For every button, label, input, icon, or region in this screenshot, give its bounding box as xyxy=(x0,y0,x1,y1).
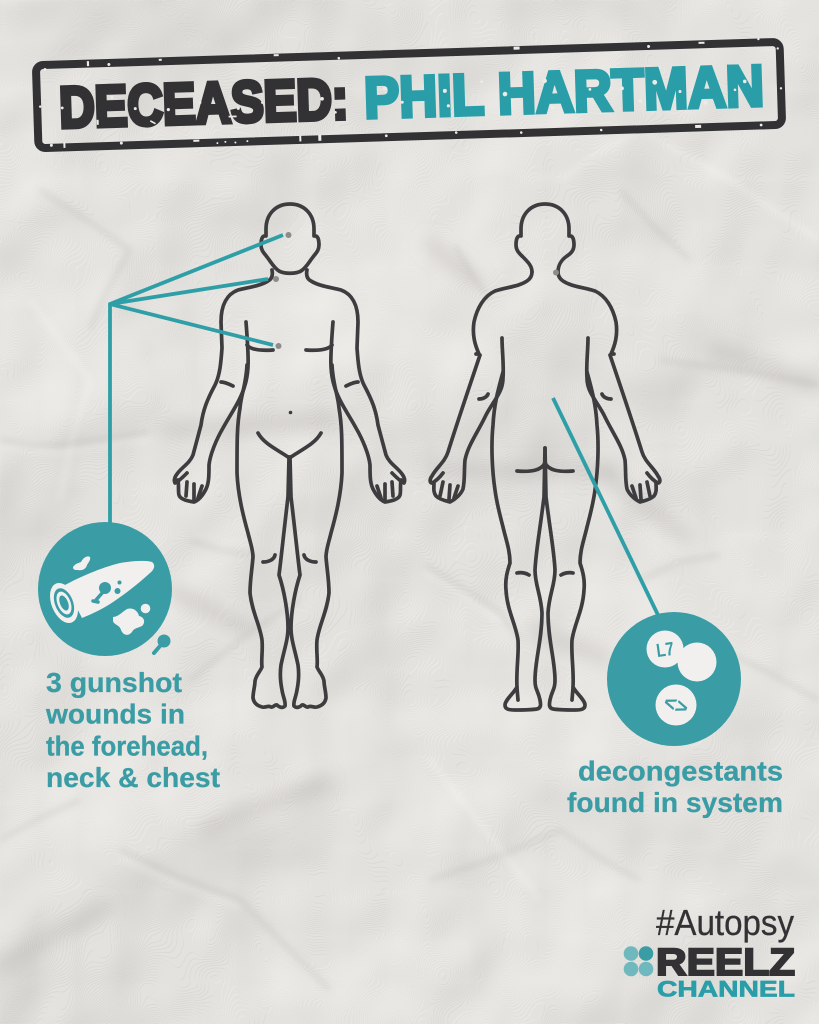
text: gunshot wounds: the forehead, xyxy=(46,730,208,762)
blood drop xyxy=(158,634,170,648)
text: decongestants: decongestants xyxy=(578,756,783,786)
leader lines: gunshot wounds xyxy=(110,235,283,525)
front head xyxy=(261,204,319,273)
text: decongestants: found in system xyxy=(567,787,783,818)
text: gunshot wounds: 3 gunshot xyxy=(46,667,182,698)
leader line: decongestants xyxy=(553,398,658,615)
logo dots xyxy=(624,946,653,976)
title stamp xyxy=(36,37,783,150)
debris xyxy=(113,608,144,635)
front body figure xyxy=(174,204,405,707)
back body left half xyxy=(430,272,545,710)
logo word REELZ: REELZ xyxy=(656,942,795,984)
text: gunshot wounds xyxy=(45,667,220,793)
logo word CHANNEL: CHANNEL xyxy=(657,976,795,1002)
wound markers xyxy=(273,232,559,349)
stamp border xyxy=(36,42,782,148)
back head xyxy=(516,204,574,272)
bullet base rings xyxy=(45,579,83,627)
icon: bullet circle xyxy=(38,522,172,656)
blank pill xyxy=(678,642,716,682)
bullet hole xyxy=(93,580,122,602)
text: decongestants xyxy=(567,756,783,818)
pill with angle mark: <> xyxy=(660,690,691,720)
text: gunshot wounds: wounds in xyxy=(45,698,185,730)
title text: name: PHIL HARTMAN xyxy=(363,53,765,131)
front navel xyxy=(289,411,292,414)
pill with L7 mark: L7 xyxy=(655,637,675,662)
bullet body xyxy=(65,561,154,618)
title text: deceased: DECEASED: xyxy=(58,66,349,141)
logo: Reelz Channel xyxy=(624,942,795,1002)
front body left half xyxy=(174,270,289,707)
hashtag: #Autopsy xyxy=(656,902,794,943)
icon: pills circle xyxy=(607,612,741,746)
text: gunshot wounds: neck & chest xyxy=(46,762,220,793)
back body figure xyxy=(430,204,660,710)
distress speckles xyxy=(38,37,783,150)
